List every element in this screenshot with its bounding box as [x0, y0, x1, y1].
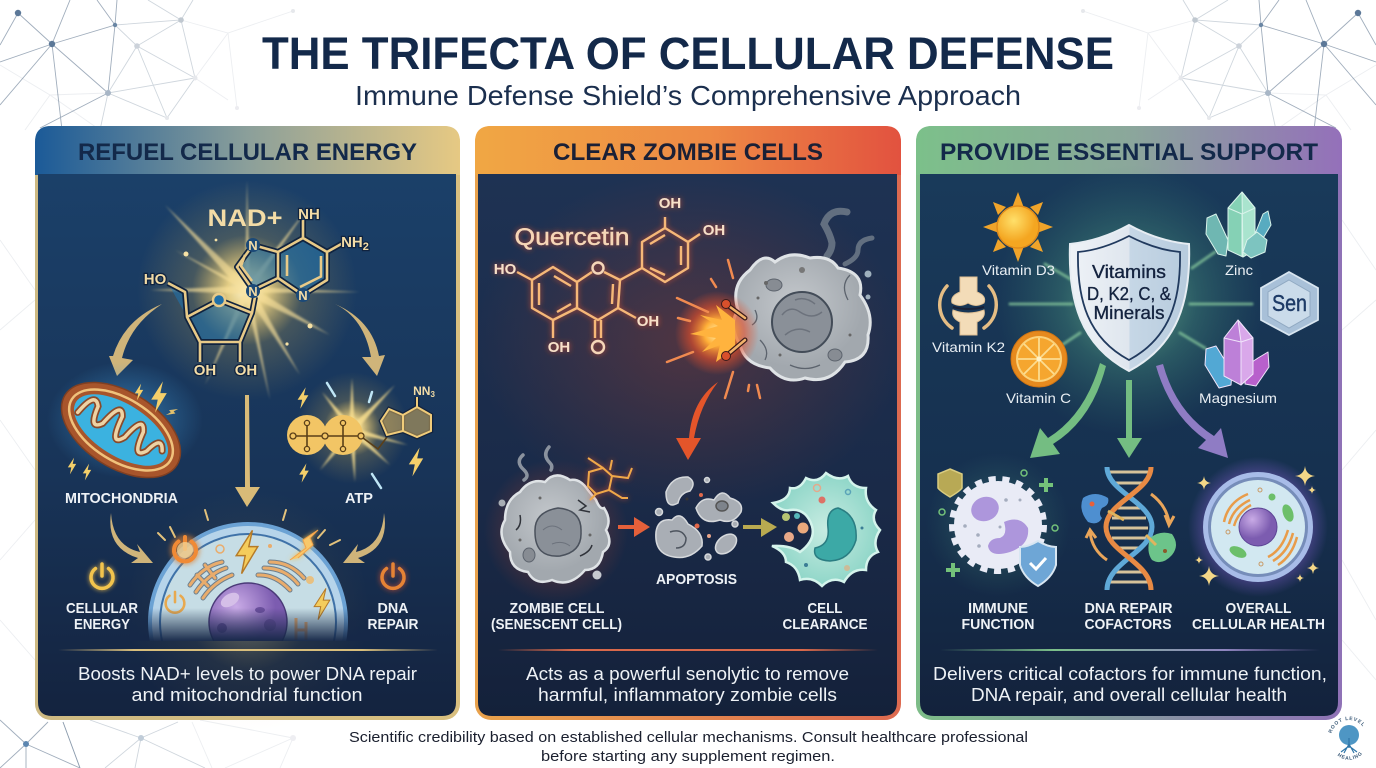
icon: cellular energy power	[91, 564, 113, 588]
attack burst	[667, 260, 760, 398]
molecule labels	[144, 206, 369, 379]
zombie cell label: ZOMBIE CELL	[510, 600, 604, 617]
molecule labels: OH	[235, 362, 257, 379]
cell clearance label: CLEARANCE	[782, 616, 868, 633]
panel frame	[475, 126, 901, 720]
icon: healthy cell	[1188, 457, 1328, 597]
shield glow and connector rays	[995, 165, 1265, 435]
arrow: NAD+ to cell	[235, 395, 260, 507]
icon: apoptosis fragments	[656, 477, 742, 560]
arrow: zombie cell to apoptosis	[618, 517, 650, 537]
arrow: shield to cellular health	[1156, 364, 1228, 458]
icon: selenium hexagon: Sen	[1272, 290, 1307, 316]
panel heading: REFUEL CELLULAR ENERGY	[78, 139, 417, 166]
panel description: DNA repair, and overall cellular health	[971, 684, 1287, 705]
molecule labels: OH	[548, 339, 570, 356]
logo: root level healing	[1328, 716, 1364, 760]
logo: root level healing: ROOT LEVEL	[1328, 716, 1364, 734]
panel header band	[475, 126, 901, 175]
arrow: shield to immune function	[1030, 363, 1106, 458]
arrow: NAD+ to ATP	[335, 304, 385, 376]
molecule labels: OH	[637, 313, 659, 330]
zinc label: Zinc	[1225, 262, 1253, 278]
molecule labels: NH	[298, 206, 320, 223]
icon: small molecule on zombie cell	[588, 458, 632, 500]
magnesium label: Magnesium	[1199, 390, 1277, 406]
icon: sun	[983, 192, 1053, 262]
footer disclaimer: before starting any supplement regimen.	[541, 748, 835, 765]
panel body	[920, 174, 1338, 716]
NAD+ glow burst	[137, 180, 360, 400]
logo: root level healing: HEALING	[1338, 752, 1362, 760]
immune function label: IMMUNE	[968, 600, 1028, 617]
panel header band	[35, 126, 460, 175]
title: THE TRIFECTA OF CELLULAR DEFENSE	[262, 28, 1114, 79]
panel description: and mitochondrial function	[132, 684, 362, 705]
zombie cell label: (SENESCENT CELL)	[491, 616, 622, 633]
panel heading: PROVIDE ESSENTIAL SUPPORT	[940, 139, 1318, 166]
cell clearance label: CELL	[808, 600, 842, 617]
panel frame	[916, 126, 1342, 720]
molecule labels: NH	[341, 234, 363, 251]
molecule labels: HO	[144, 271, 167, 288]
arrow: apoptosis to clearance	[743, 518, 777, 537]
NAD+ label: NAD+	[208, 205, 282, 232]
icon: DNA helix with repair enzymes	[1081, 467, 1176, 590]
panel: clear zombie cells	[475, 126, 905, 720]
cellular energy label: ENERGY	[74, 616, 130, 633]
panel description: Acts as a powerful senolytic to remove	[526, 663, 849, 684]
shield: D, K2, C, &	[1087, 284, 1171, 304]
icon: NAD+ molecule: N	[248, 284, 258, 299]
shield: Minerals	[1094, 303, 1164, 323]
panel frame	[35, 126, 460, 720]
vitamin C label: Vitamin C	[1006, 390, 1071, 406]
overall cellular health label: CELLULAR HEALTH	[1192, 616, 1325, 633]
icon: cell clearance macrophage	[772, 473, 880, 586]
arrow: to apoptosis	[676, 382, 718, 460]
overall cellular health label: OVERALL	[1226, 600, 1292, 617]
icon: NAD+ molecule: N	[298, 288, 308, 303]
icon: NAD+ molecule: N	[248, 238, 258, 253]
panel description: harmful, inflammatory zombie cells	[538, 684, 837, 705]
ATP label: ATP	[345, 490, 373, 507]
panel: refuel cellular energy	[35, 126, 460, 732]
icon: ATP: 3	[430, 390, 435, 399]
icon: mitochondria	[45, 362, 203, 497]
icon: ATP	[287, 372, 435, 488]
molecule labels: OH	[703, 222, 725, 239]
icon: selenium hexagon	[1261, 272, 1318, 335]
arrow: shield to DNA repair	[1117, 380, 1142, 458]
panel body	[38, 174, 456, 716]
icon: orange slice	[1011, 331, 1067, 387]
molecule labels	[494, 195, 725, 356]
icon: zinc crystals	[1206, 192, 1271, 258]
mitochondria label: MITOCHONDRIA	[65, 490, 178, 507]
icon: senescent zombie cell	[733, 211, 872, 380]
panel description: Boosts NAD+ levels to power DNA repair	[78, 663, 417, 684]
icon: zombie cell	[484, 447, 628, 603]
icon: ATP: NN	[413, 384, 430, 398]
icon: magnesium crystals	[1205, 320, 1269, 388]
immune function label: FUNCTION	[962, 616, 1034, 633]
vitamin D3 label: Vitamin D3	[982, 262, 1055, 278]
icon: DNA repair power	[382, 564, 404, 588]
panel description: Delivers critical cofactors for immune function,	[933, 663, 1327, 684]
molecule labels: OH	[659, 195, 681, 212]
shield	[1070, 225, 1189, 371]
arrow: mitochondria to cell	[110, 513, 153, 563]
cellular energy label: CELLULAR	[66, 600, 138, 617]
arrow: NAD+ to mitochondria	[109, 304, 162, 376]
icon: NAD+ molecule	[168, 220, 343, 362]
vitamin K2 label: Vitamin K2	[932, 339, 1005, 355]
footer disclaimer: Scientific credibility based on established cellular mechanisms. Consult healthcare professional	[349, 729, 1028, 746]
molecule labels: OH	[194, 362, 216, 379]
arrow: ATP to cell	[343, 513, 385, 563]
panel header band	[916, 126, 1342, 175]
subtitle: Immune Defense Shield’s Comprehensive Approach	[355, 80, 1021, 111]
DNA repair label: DNA	[378, 600, 409, 617]
icon: quercetin molecule	[517, 217, 700, 353]
quercetin label: Quercetin	[514, 224, 630, 251]
icon: knee joint	[940, 277, 996, 335]
apoptosis label: APOPTOSIS	[656, 571, 737, 588]
shield: Vitamins	[1092, 262, 1166, 282]
panel: provide essential support	[916, 126, 1342, 720]
molecule labels: HO	[494, 261, 517, 278]
DNA repair cofactors label: COFACTORS	[1084, 616, 1172, 633]
panel heading: CLEAR ZOMBIE CELLS	[553, 139, 823, 166]
molecule labels: 2	[363, 241, 369, 253]
panel body	[478, 174, 897, 716]
icon: energized cell	[148, 509, 348, 696]
icon: immune cell	[926, 453, 1070, 597]
DNA repair cofactors label: DNA REPAIR	[1084, 600, 1173, 617]
DNA repair label: REPAIR	[368, 616, 419, 633]
